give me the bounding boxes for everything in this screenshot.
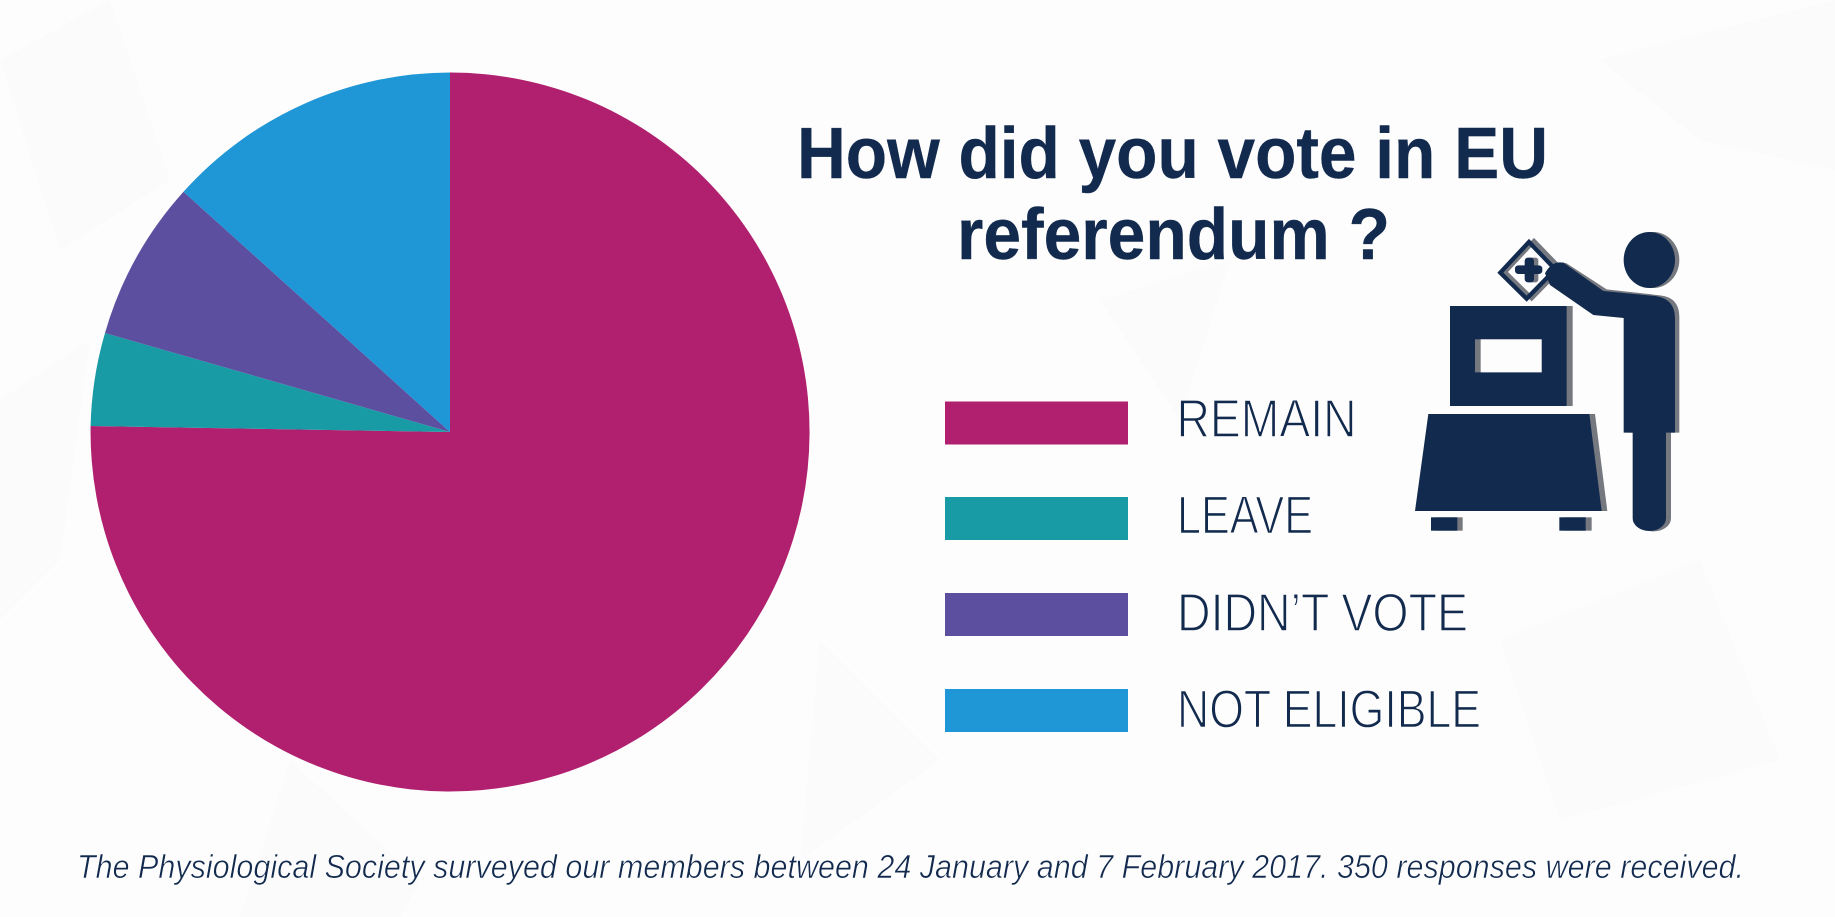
legend xyxy=(945,389,1481,739)
pie slice: didn't vote xyxy=(105,192,450,432)
icon: person voting at ballot box xyxy=(1415,232,1679,531)
legend item: not eligible: NOT ELIGIBLE xyxy=(1177,679,1481,739)
legend item: remain xyxy=(945,389,1356,449)
pie slice: leave xyxy=(91,333,450,432)
pie slice: not eligible xyxy=(184,72,450,432)
pie chart xyxy=(91,72,810,792)
legend item: leave xyxy=(945,485,1313,545)
icon: ballot paper xyxy=(1500,241,1561,299)
legend item: didn't vote xyxy=(945,583,1468,643)
legend item: remain: REMAIN xyxy=(1176,389,1356,449)
title xyxy=(797,114,1548,275)
title: referendum ? xyxy=(957,195,1390,275)
legend item: not eligible xyxy=(945,679,1481,739)
icon: ballot box xyxy=(1450,306,1567,406)
icon shadow xyxy=(1420,232,1679,531)
footnote: The Physiological Society surveyed our members between 24 January and 7 February 2017. 350 responses were received. xyxy=(77,848,1744,885)
icon: person xyxy=(1545,232,1675,531)
legend item: didn't vote: DIDN’T VOTE xyxy=(1177,583,1468,643)
pie slice: remain xyxy=(91,72,810,792)
legend item: leave: LEAVE xyxy=(1177,485,1313,545)
title: How did you vote in EU xyxy=(797,114,1548,194)
icon: table xyxy=(1415,414,1602,531)
